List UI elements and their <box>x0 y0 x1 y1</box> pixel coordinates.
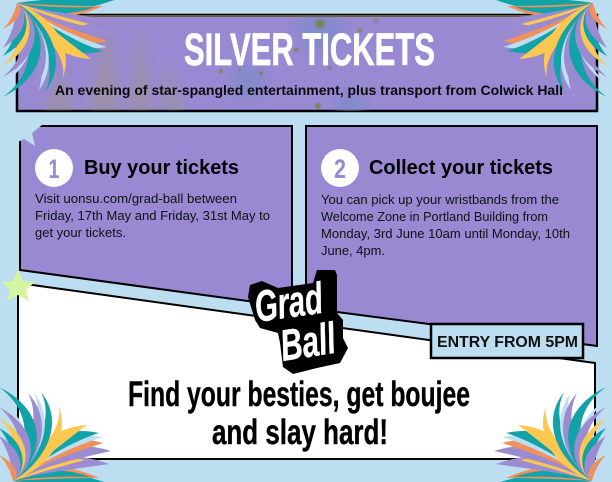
logo: Grad Ball <box>248 270 348 374</box>
text: collection instructions: Welcome Zone in Portland Building from <box>321 210 548 224</box>
callout: entry time <box>431 324 583 358</box>
icon: number 1 <box>35 149 73 187</box>
heading: closing message: Find your besties, get boujee <box>128 375 470 414</box>
text: buy instructions: Visit uonsu.com/grad-ball between <box>35 192 237 206</box>
icon: number 1: 1 <box>48 154 60 184</box>
title: SILVER TICKETS <box>184 24 435 75</box>
heading: closing message: and slay hard! <box>212 413 388 452</box>
heading: buy your tickets: Buy your tickets <box>84 157 239 179</box>
text: buy instructions: get your tickets. <box>35 226 126 240</box>
panel: step 2 collect tickets <box>306 126 597 346</box>
icon: firework top right <box>493 0 607 97</box>
logo: Grad Ball: Ball <box>277 314 339 371</box>
text: collection instructions: June, 4pm. <box>321 244 385 258</box>
icon: firework top left <box>3 0 117 97</box>
panel: header banner <box>16 14 598 112</box>
heading: collect your tickets: Collect your tickets <box>369 157 553 179</box>
panel: white lower banner <box>18 283 595 459</box>
icon: firework bottom right <box>492 387 606 482</box>
icon: green star <box>2 269 35 301</box>
callout: entry time: ENTRY FROM 5PM <box>437 334 578 351</box>
heading: closing message <box>128 375 470 452</box>
logo: Grad Ball: Grad <box>252 274 326 332</box>
blurred flower photo <box>40 15 532 111</box>
icon: number 2 <box>321 149 359 187</box>
icon: firework bottom left <box>0 387 113 482</box>
text: collection instructions <box>321 193 570 258</box>
panel: step 1 buy tickets <box>20 126 292 307</box>
icon: number 2: 2 <box>334 154 346 184</box>
text: buy instructions: Friday, 17th May and Friday, 31st May to <box>35 209 270 223</box>
text: collection instructions: Monday, 3rd June 10am until Monday, 10th <box>321 227 570 241</box>
subtitle: An evening of star-spangled entertainment, plus transport from Colwick Hall <box>55 82 563 98</box>
icon: light blue star <box>18 122 42 146</box>
text: collection instructions: You can pick up your wristbands from the <box>321 193 559 207</box>
text: buy instructions <box>35 192 270 240</box>
